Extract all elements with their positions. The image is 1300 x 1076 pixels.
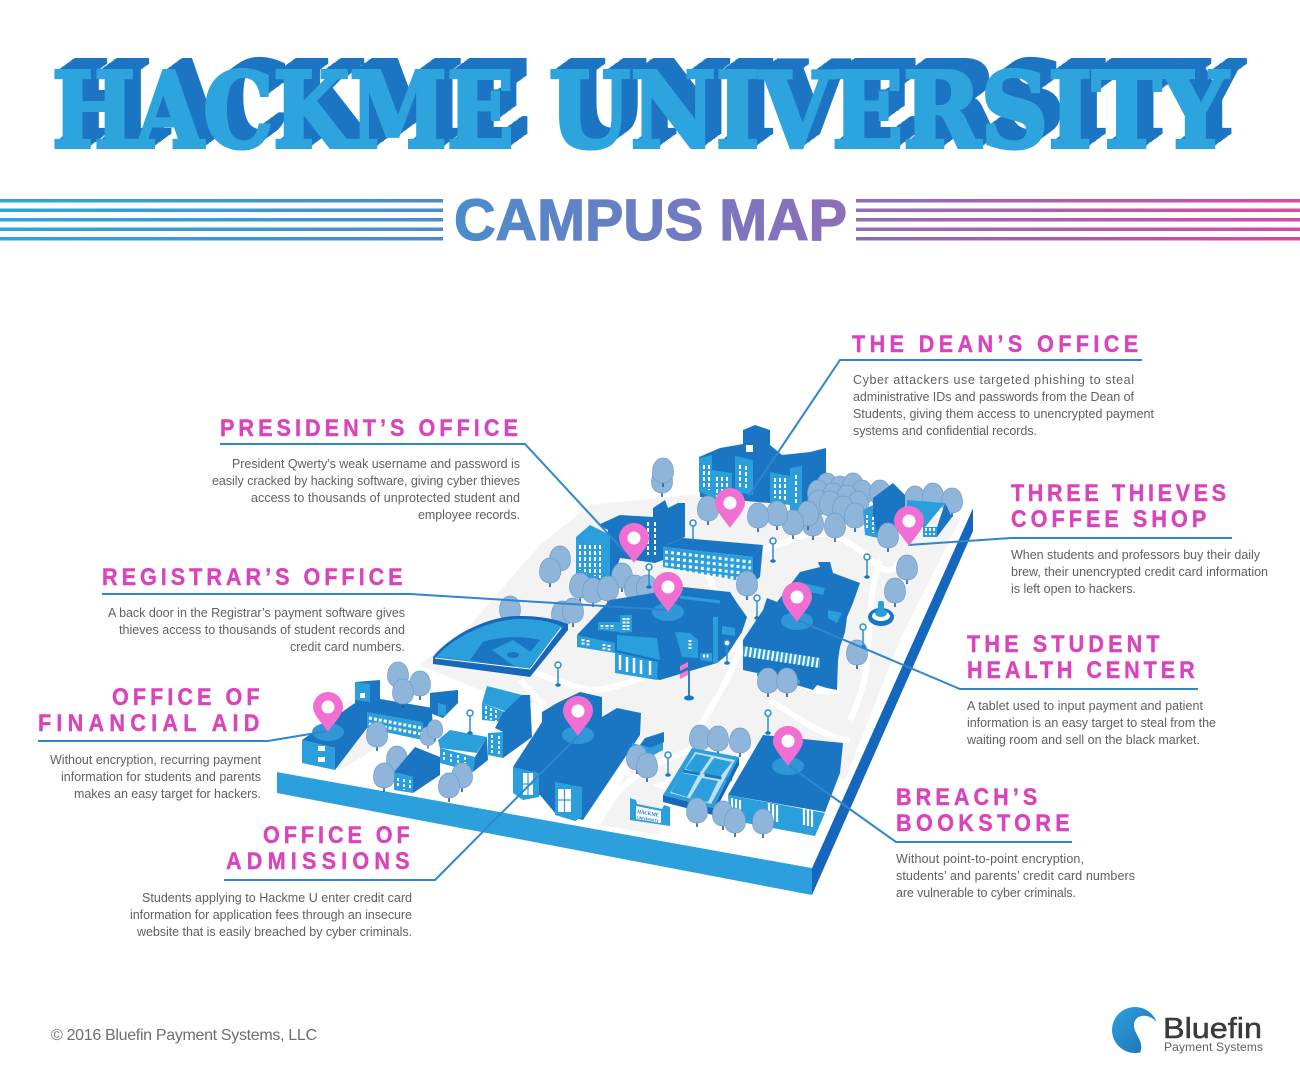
text: admissions [130, 891, 412, 939]
heading: office of financial aid: OFFICE OF [112, 683, 260, 710]
heading: three thieves coffee shop [1011, 479, 1226, 532]
text: dean's office: systems and confidential records. [853, 424, 1037, 438]
heading: office of admissions [226, 821, 410, 874]
leader line: bookstore [788, 765, 1072, 842]
street lamps [467, 520, 870, 777]
building: breach's bookstore [686, 735, 843, 838]
title [52, 49, 1247, 172]
leader line: coffee shop [908, 538, 1232, 545]
heading: breach's bookstore: BREACH’S [896, 783, 1037, 810]
text: coffee shop: brew, their unencrypted credit card information [1011, 565, 1268, 579]
logo: bluefin: Payment Systems [1164, 1040, 1263, 1054]
panel: three thieves coffee shop [908, 479, 1268, 596]
heading: office of financial aid [38, 683, 260, 736]
text: coffee shop: When students and professors buy their daily [1011, 548, 1261, 562]
heading: student health center [967, 630, 1195, 683]
panel: office of admissions [130, 736, 578, 939]
panel: the student health center [797, 620, 1216, 747]
heading: student health center: HEALTH CENTER [967, 656, 1195, 683]
logo: bluefin: Bluefin [1163, 1013, 1262, 1045]
heading: registrar's office: REGISTRAR’S OFFICE [102, 563, 403, 590]
leader line: registrar's office [102, 594, 668, 610]
subtitle: CAMPUS MAP [454, 188, 847, 253]
title: UNIVERSITY [549, 49, 1228, 172]
text: bookstore: Without point-to-point encryption, [896, 852, 1084, 866]
campus houses [374, 686, 532, 802]
heading: breach's bookstore: BOOKSTORE [896, 809, 1070, 836]
text: financial aid: information for students and parents [61, 770, 261, 784]
tennis courts [663, 725, 750, 815]
panel: registrar's office [102, 563, 668, 654]
panel: office of financial aid [38, 683, 328, 801]
heading: student health center: THE STUDENT [967, 630, 1160, 657]
text: financial aid: makes an easy target for hackers. [74, 787, 261, 801]
building: registrar's office [577, 587, 747, 680]
building: president's office [576, 500, 763, 585]
text: admissions: Students applying to Hackme U enter credit card [142, 891, 412, 905]
heading: office of admissions: OFFICE OF [263, 821, 410, 848]
campus entrance sign: UNIVERSITY [637, 816, 660, 823]
text: president's office [212, 457, 520, 522]
text: financial aid: Without encryption, recurring payment [50, 753, 262, 767]
icon: bluefin wave [1112, 1007, 1160, 1053]
flag [680, 660, 694, 700]
text: registrar's office [108, 606, 405, 654]
text: health center: information is an easy target to steal from the [967, 716, 1216, 730]
right stripes [856, 199, 1300, 240]
panel: the dean's office [748, 330, 1155, 497]
text: coffee shop: is left open to hackers. [1011, 582, 1136, 596]
title: HACKME [52, 49, 514, 172]
building: student health center [743, 562, 868, 697]
text: president's office: employee records. [418, 508, 520, 522]
fountain [868, 601, 894, 626]
pin halos [312, 603, 813, 775]
text: dean's office: Students, giving them access to unencrypted payment [853, 407, 1155, 421]
text: health center [966, 699, 1216, 747]
building: financial aid [302, 662, 458, 770]
text: dean's office: administrative IDs and passwords from the Dean of [853, 390, 1135, 404]
leader line: dean's office [748, 360, 1142, 497]
text: admissions: website that is easily breached by cyber criminals. [136, 925, 412, 939]
baseball field [433, 616, 568, 677]
text: dean's office [853, 373, 1155, 438]
heading: breach's bookstore [896, 783, 1070, 836]
text: president's office: easily cracked by hacking software, giving cyber thieves [212, 474, 520, 488]
text: health center: A tablet used to input payment and patient [967, 699, 1204, 713]
heading: office of financial aid: FINANCIAL AID [38, 709, 259, 736]
text: president's office: President Qwerty’s weak username and password is [232, 457, 520, 471]
panel: president's office [212, 414, 625, 552]
heading: the dean's office: THE DEAN’S OFFICE [852, 330, 1138, 357]
text: coffee shop [1011, 548, 1268, 596]
left stripes [0, 199, 443, 240]
campus entrance sign: HACKME [637, 809, 660, 819]
trees: president's office [500, 546, 758, 630]
logo: bluefin [1112, 1007, 1263, 1054]
leader line: president's office [220, 444, 625, 552]
ground platform [277, 480, 973, 895]
heading: three thieves coffee shop: THREE THIEVES [1011, 479, 1226, 506]
leader line: health center [797, 620, 1198, 689]
trees: dean's grove [652, 458, 872, 542]
campus entrance sign [630, 798, 670, 826]
text: president's office: access to thousands of unprotected student and [251, 491, 520, 505]
text: admissions: information for application fees through an insecure [130, 908, 412, 922]
campus map [277, 425, 973, 895]
heading: three thieves coffee shop: COFFEE SHOP [1011, 505, 1206, 532]
location pins [313, 488, 924, 766]
building: coffee shop [863, 480, 962, 538]
leader line: admissions [224, 736, 578, 880]
building: office of admissions [513, 692, 664, 821]
text: registrar's office: thieves access to thousands of student records and [119, 623, 405, 637]
copyright: © 2016 Bluefin Payment Systems, LLC [51, 1027, 317, 1044]
text: bookstore: students’ and parents’ credit card numbers [896, 869, 1135, 883]
heading: office of admissions: ADMISSIONS [226, 847, 410, 874]
text: health center: waiting room and sell on the black market. [966, 733, 1200, 747]
panel: breach's bookstore [788, 765, 1135, 900]
text: bookstore [896, 852, 1135, 900]
text: registrar's office: credit card numbers. [290, 640, 405, 654]
text: bookstore: are vulnerable to cyber criminals. [896, 886, 1076, 900]
building: dean's office [699, 425, 826, 512]
text: dean's office: Cyber attackers use targeted phishing to steal [853, 373, 1134, 387]
text: financial aid [50, 753, 262, 801]
leader line: financial aid [38, 731, 328, 741]
text: registrar's office: A back door in the Registrar’s payment software gives [108, 606, 405, 620]
heading: president's office: PRESIDENT’S OFFICE [220, 414, 518, 441]
